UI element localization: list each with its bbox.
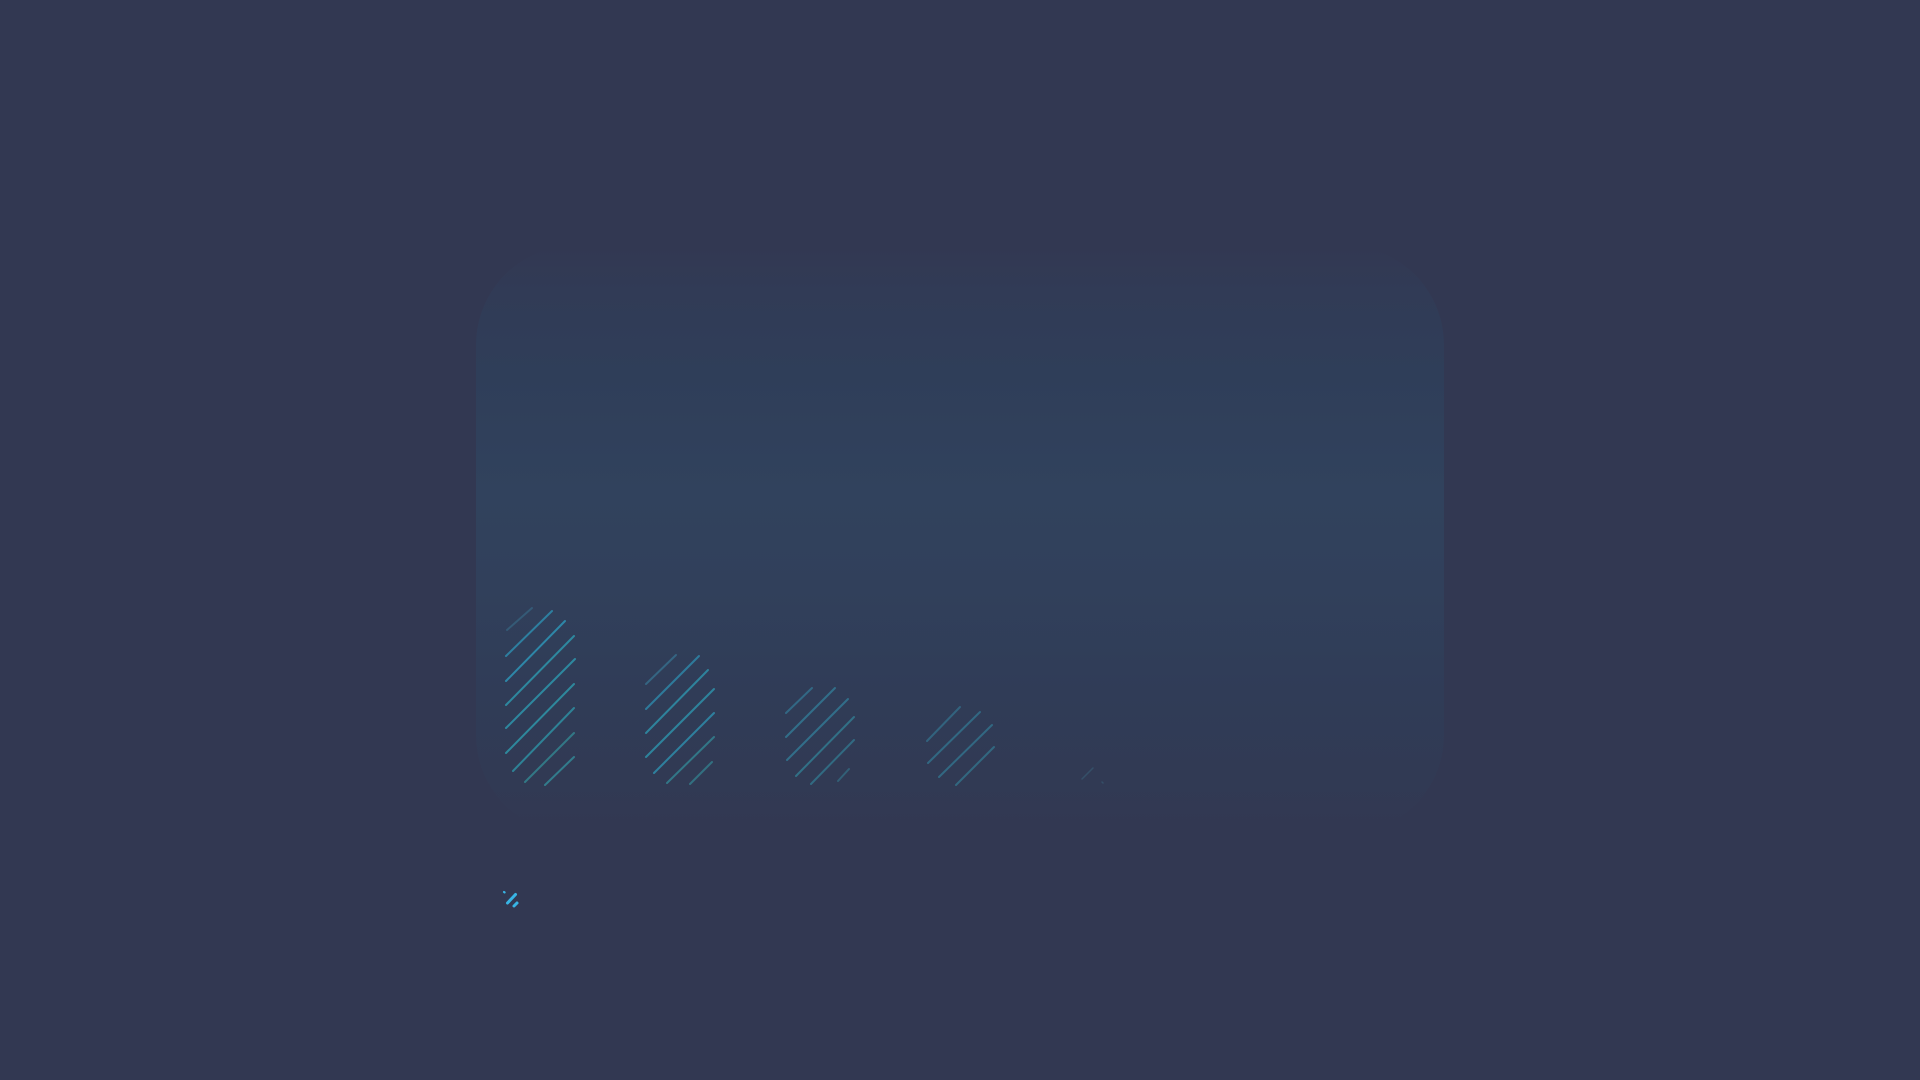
bar 3 (786, 688, 854, 784)
icon: legend hatch swatch (504, 892, 517, 906)
bar 1 (506, 608, 575, 785)
bar 5 (1082, 768, 1103, 783)
bar 2 (646, 655, 714, 784)
panel: chart card (476, 245, 1444, 835)
bar 4 (927, 707, 994, 785)
bar chart (506, 608, 1103, 785)
